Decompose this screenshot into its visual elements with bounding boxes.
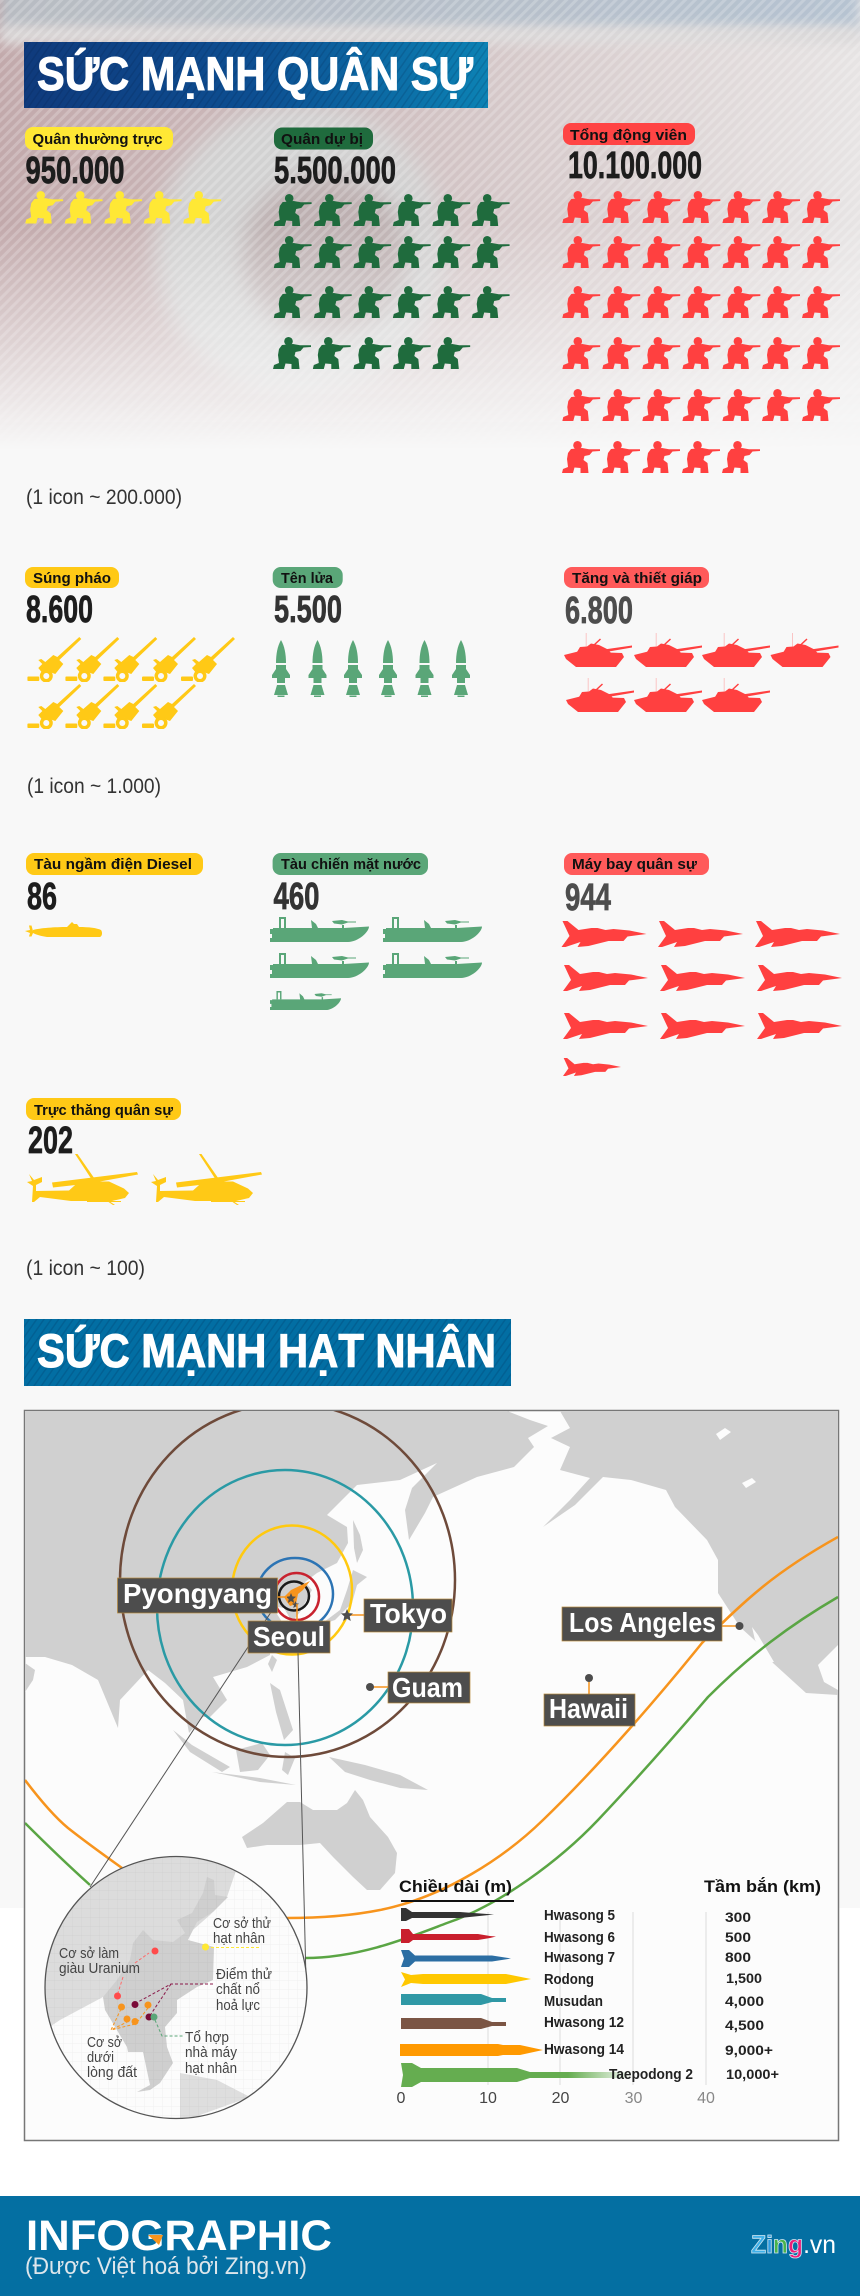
title: nuclear power: SỨC MẠNH HẠT NHÂN (37, 1324, 496, 1377)
label: artillery: Súng pháo (33, 570, 111, 587)
panel: total mobilization (562, 123, 840, 473)
chart axis: length scale: 0 (397, 2090, 406, 2107)
sites: underground facilities: dưới (87, 2049, 114, 2066)
panel: missiles (272, 567, 470, 697)
icons: ships (270, 917, 482, 1010)
missile: Hwasong 7 (401, 1949, 751, 1967)
missile: Hwasong 6 (401, 1929, 751, 1946)
sites: nuclear test site: hạt nhân (213, 1930, 265, 1947)
label: reserve troops: Quân dự bị (281, 131, 363, 148)
icon: Korea highlight with capital stars (284, 1581, 310, 1608)
icons: green soldiers (273, 194, 510, 369)
missile: Rodong (401, 1970, 762, 1988)
sites: nuclear plant complex: hạt nhân (185, 2060, 237, 2077)
missile: Hwasong 14: 9,000+ (725, 2042, 773, 2058)
number: artillery: 8.600 (26, 589, 93, 631)
label: Tokyo (341, 1598, 452, 1632)
label: Pyongyang: Pyongyang (123, 1578, 272, 1609)
icons: helicopters (27, 1154, 262, 1205)
title: military power: SỨC MẠNH QUÂN SỰ (37, 47, 473, 100)
missile: Taepodong 2 (401, 2063, 779, 2087)
chart axis: length scale: 10 (479, 2090, 497, 2107)
missile: Hwasong 5 (401, 1908, 751, 1925)
sites: underground facilities (87, 2002, 152, 2081)
trajectories: long-range missile curves (25, 1537, 838, 1958)
missile: Rodong: 1,500 (726, 1970, 762, 1986)
label: artillery (25, 567, 119, 588)
label: military aircraft: Máy bay quân sự (572, 856, 697, 873)
sites: underground facilities: lòng đất (87, 2064, 138, 2081)
label: Hawaii: Hawaii (549, 1693, 628, 1724)
icons: fighter jets (562, 921, 842, 1076)
sites: underground facilities: Cơ sở (87, 2034, 122, 2051)
label: missiles (273, 567, 343, 588)
icon: submarine (25, 922, 102, 937)
panel: diesel submarines (25, 853, 203, 937)
number: missiles: 5.500 (274, 589, 342, 631)
missile: Hwasong 12: Hwasong 12 (544, 2015, 624, 2031)
note: aircraft icon scale: (1 icon ~ 100) (26, 1257, 145, 1280)
note: weapons icon scale: (1 icon ~ 1.000) (27, 775, 161, 798)
number: military aircraft: 944 (565, 877, 611, 919)
label: Tokyo: Tokyo (370, 1598, 447, 1629)
label: military helicopters: Trực thăng quân sự (34, 1102, 173, 1119)
missile: Taepodong 2: 10,000+ (726, 2066, 779, 2082)
panel: military helicopters (26, 1098, 262, 1205)
number: total mobilization: 10.100.000 (568, 145, 702, 187)
sites: enrichment facilities: giàu Uranium (59, 1960, 140, 1977)
panel: active troops (25, 127, 221, 224)
chart header: range: Tầm bắn (km) (704, 1877, 821, 1896)
number: reserve troops: 5.500.000 (274, 150, 396, 192)
label: Guam: Guam (392, 1672, 463, 1703)
sites: nuclear plant complex: nhà máy (185, 2044, 237, 2061)
chart axis: length scale: 20 (552, 2090, 570, 2107)
missile: Taepodong 2: Taepodong 2 (609, 2067, 693, 2083)
missile: Rodong: Rodong (544, 1972, 594, 1988)
label: active troops (25, 127, 173, 150)
missile: Musudan: Musudan (544, 1994, 603, 2010)
icons: red soldiers (562, 191, 840, 473)
inset map: North Korea nuclear sites (40, 1850, 315, 2125)
map: world land masses (25, 1411, 838, 1890)
missile: Musudan (401, 1993, 764, 2010)
label: total mobilization: Tổng động viên (570, 127, 687, 144)
sites: explosive test points: Điểm thử (216, 1966, 272, 1983)
missile: Hwasong 5: 300 (725, 1909, 751, 1925)
number: active troops: 950.000 (26, 150, 124, 192)
sites: nuclear test site (202, 1915, 271, 1950)
label: Seoul: Seoul (253, 1621, 325, 1652)
panel: military aircraft (562, 853, 842, 1076)
missile: Hwasong 12: 4,500 (725, 2017, 764, 2033)
chart header: length: Chiều dài (m) (399, 1877, 512, 1896)
footer: Zing.vn logo: Zing.vn (751, 2231, 836, 2259)
missile: Hwasong 12 (401, 2015, 764, 2033)
label: Seoul (248, 1604, 330, 1653)
sites: explosive test points: hoả lực (216, 1997, 260, 2014)
missile: Hwasong 6: Hwasong 6 (544, 1930, 615, 1946)
icons: cannons (27, 637, 235, 730)
panel: missile range map (24, 1403, 838, 2140)
missile: Hwasong 5: Hwasong 5 (544, 1908, 615, 1924)
label: surface warships: Tàu chiến mặt nước (281, 856, 421, 873)
label: tanks and armor: Tăng và thiết giáp (572, 570, 702, 587)
label: diesel submarines: Tàu ngầm điện Diesel (34, 856, 192, 873)
chart: missile length and range (397, 1877, 821, 2107)
missile: Musudan: 4,000 (725, 1993, 764, 2009)
sites: nuclear plant complex (150, 2014, 237, 2077)
footer: INFOGRAPHIC logotype: INFOGRAPHIC (26, 2212, 332, 2260)
zoom lines to inset (90, 1603, 306, 1980)
panel: reserve troops (273, 128, 510, 369)
sites: enrichment facilities: Cơ sở làm (59, 1945, 119, 1962)
icons: tanks (564, 633, 838, 712)
icons: missiles (272, 640, 470, 697)
range rings around North Korea (120, 1403, 455, 1757)
label: military aircraft (564, 853, 709, 875)
chart axis: length scale (397, 1912, 715, 2107)
sites: nuclear test site: Cơ sở thử (213, 1915, 271, 1932)
missile: Hwasong 14: Hwasong 14 (544, 2042, 624, 2058)
label: Hawaii (544, 1674, 635, 1726)
missile: Hwasong 7: Hwasong 7 (544, 1950, 615, 1966)
sites: enrichment facilities (59, 1945, 158, 2000)
number: surface warships: 460 (274, 876, 320, 918)
label: active troops: Quân thường trực (32, 131, 162, 148)
panel: tanks and armor (564, 567, 838, 712)
label: missiles: Tên lửa (281, 570, 334, 587)
label: total mobilization (563, 123, 695, 145)
label: reserve troops (274, 128, 373, 150)
number: diesel submarines: 86 (27, 876, 57, 918)
note: troop icon scale: (1 icon ~ 200.000) (26, 486, 182, 509)
panel: artillery (25, 567, 235, 730)
missile: Hwasong 6: 500 (725, 1929, 751, 1945)
label: Los Angeles: Los Angeles (569, 1607, 716, 1638)
sites: nuclear plant complex: Tổ hợp (185, 2029, 229, 2046)
sites: explosive test points (132, 1966, 272, 2020)
icons: yellow soldiers (25, 191, 221, 224)
footer band (0, 2196, 860, 2296)
missile: Hwasong 7: 800 (725, 1949, 751, 1965)
number: tanks and armor: 6.800 (565, 590, 633, 632)
flag background image (0, 0, 860, 450)
label: diesel submarines (26, 853, 203, 875)
sites: explosive test points: chất nổ (216, 1981, 260, 1998)
chart axis: length scale: 40 (697, 2090, 715, 2107)
chart axis: length scale: 30 (625, 2090, 642, 2107)
missile: Hwasong 14 (400, 2042, 773, 2058)
footer: localisation credit: (Được Việt hoá bởi Zing.vn) (25, 2253, 307, 2280)
number: military helicopters: 202 (28, 1120, 73, 1162)
panel: surface warships (270, 853, 482, 1010)
